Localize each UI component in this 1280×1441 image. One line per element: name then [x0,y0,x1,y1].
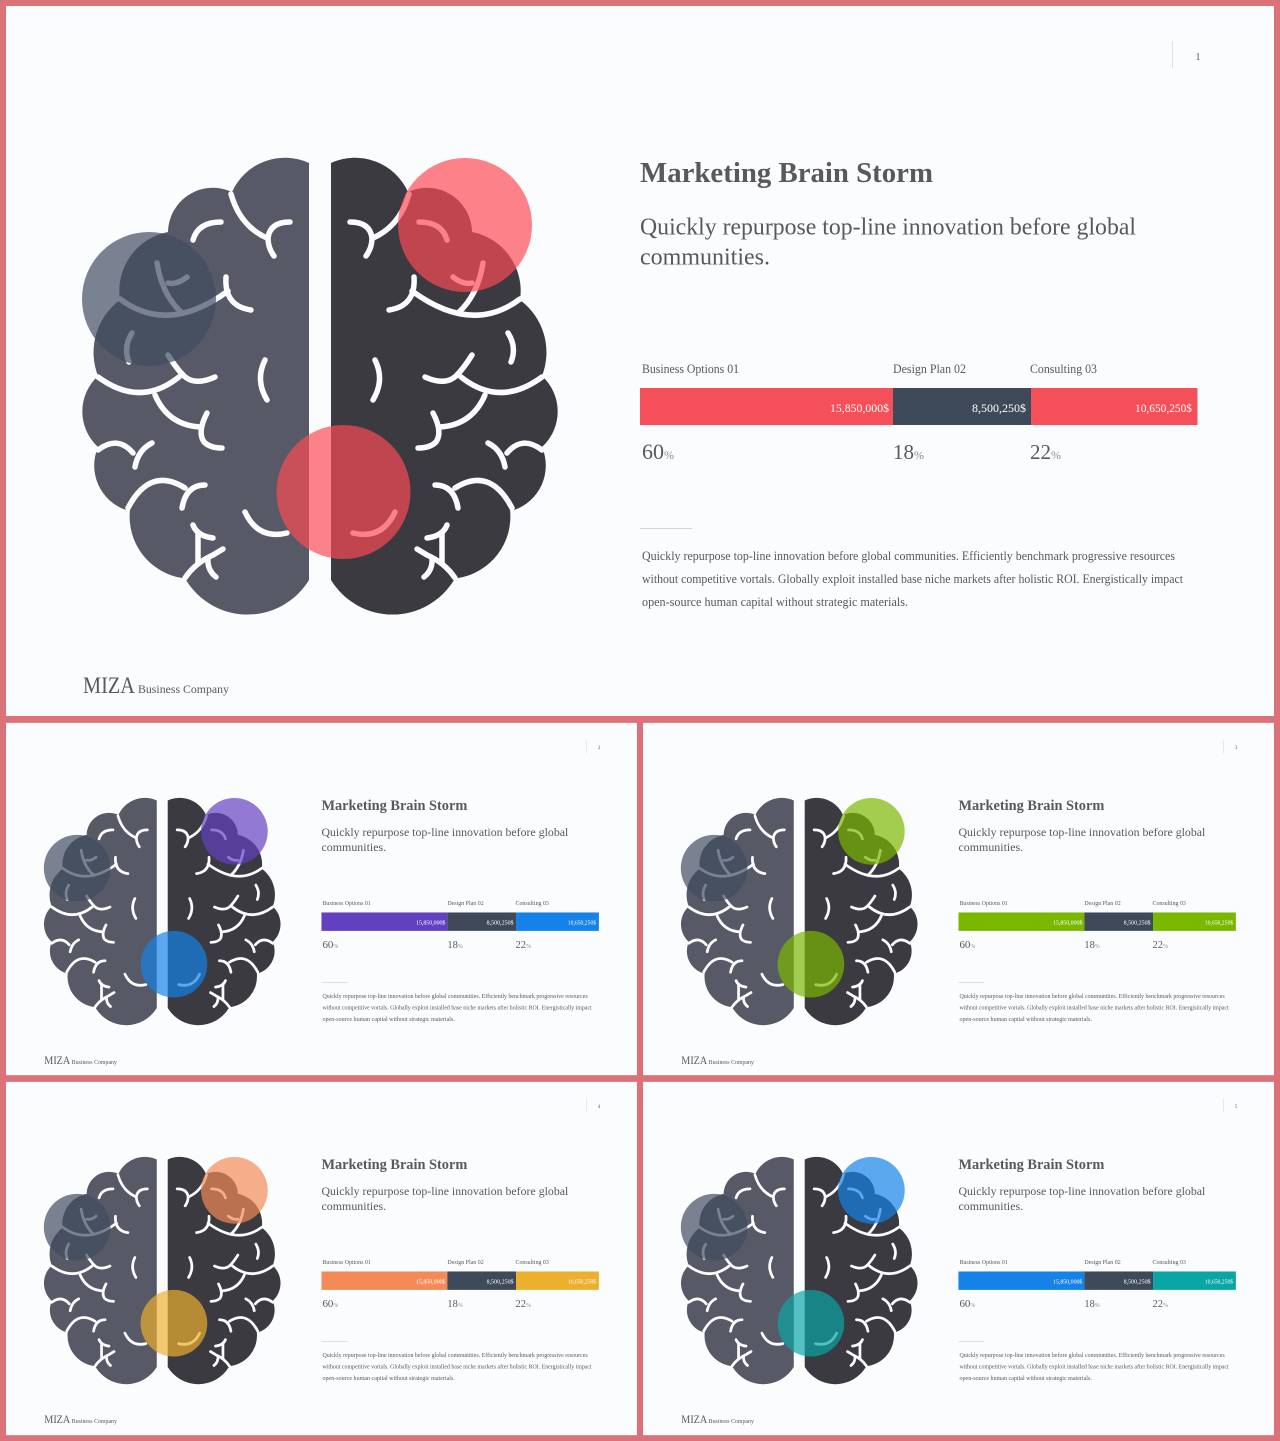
subtitle: Quickly repurpose top-line innovation before global [321,1184,569,1198]
bar chart: 8,500,250$ [487,919,514,926]
subtitle: Quickly repurpose top-line innovation before global [640,214,1136,240]
title: Marketing Brain Storm [958,798,1104,814]
page number [1223,1099,1238,1112]
bar chart: 18% [893,440,924,464]
body paragraph: without competitive vortals. Globally exploit installed base niche markets after holistic ROI. Energistically impact [322,1364,592,1371]
page number [586,1099,601,1112]
page number: 1 [1196,52,1200,63]
subtitle: communities. [958,1199,1023,1213]
subtitle [321,1184,569,1213]
bar chart: 8,500,250$ [487,1278,514,1285]
bar chart: 10,650,250$ [1135,401,1192,415]
body paragraph: open-source human capital without strategic materials. [642,595,908,609]
body paragraph: without competitive vortals. Globally exploit installed base niche markets after holistic ROI. Energistically impact [959,1364,1229,1371]
bar chart: 10,650,250$ [1205,919,1233,926]
bar chart: Consulting 03 [516,1259,549,1266]
bar chart: 60% [959,939,975,951]
bar chart: 60% [959,1298,975,1310]
bar chart: Design Plan 02 [447,1259,484,1266]
subtitle: Quickly repurpose top-line innovation before global [958,1184,1206,1198]
subtitle [958,825,1206,854]
bar chart: 18% [447,940,463,951]
page number: 4 [598,1105,601,1110]
body paragraph: without competitive vortals. Globally exploit installed base niche markets after holistic ROI. Energistically impact [959,1005,1229,1012]
logo: MIZA [681,1414,708,1426]
bar chart: Consulting 03 [1153,900,1186,907]
logo [681,1414,754,1426]
logo [44,1055,117,1067]
logo [44,1414,117,1426]
brain illustration [681,1157,918,1384]
body paragraph: open-source human capital without strategic materials. [322,1375,455,1382]
bar chart: 15,850,000$ [416,919,445,926]
bar chart [321,900,599,951]
panel: slide 4 orange and yellow [6,1082,637,1435]
brain illustration [44,798,281,1025]
body paragraph: Quickly repurpose top-line innovation before global communities. Efficiently benchmark progressive resources [322,1352,588,1359]
bar chart: Consulting 03 [1153,1259,1186,1266]
bar chart: 8,500,250$ [972,401,1026,415]
bar chart [321,1259,599,1310]
brain illustration [44,1157,281,1384]
title: Marketing Brain Storm [640,157,933,189]
bar chart: 22% [1153,940,1168,951]
page number [1172,41,1200,68]
body paragraph [322,1352,592,1382]
bar chart: Business Options 01 [959,900,1008,907]
subtitle: communities. [958,840,1023,854]
body paragraph: open-source human capital without strategic materials. [959,1016,1092,1023]
bar chart: Design Plan 02 [1084,900,1121,907]
body paragraph: without competitive vortals. Globally exploit installed base niche markets after holistic ROI. Energistically impact [322,1005,592,1012]
subtitle: communities. [640,244,770,270]
bar chart: 18% [1084,940,1100,951]
bar chart [640,362,1198,464]
subtitle [958,1184,1206,1213]
subtitle: communities. [321,1199,386,1213]
bar chart: 15,850,000$ [416,1278,445,1285]
bar chart: 10,650,250$ [568,919,596,926]
page number: 2 [598,746,601,751]
body paragraph [959,1352,1229,1382]
panel: main slide [6,6,1274,716]
logo: Business Company [709,1419,754,1425]
bar chart: Business Options 01 [642,362,739,376]
logo: MIZA [681,1055,708,1067]
bar chart: 22% [516,1299,531,1310]
panel: slide 3 green [643,723,1274,1075]
bar chart: 10,650,250$ [1205,1278,1233,1285]
bar chart: Design Plan 02 [1084,1259,1121,1266]
bar chart: 60% [642,439,674,464]
title: Marketing Brain Storm [958,1157,1104,1173]
page number: 5 [1235,1105,1238,1110]
bar chart: 22% [516,940,531,951]
bar chart: 10,650,250$ [568,1278,596,1285]
logo: MIZA [44,1055,71,1067]
bar chart: 22% [1153,1299,1168,1310]
body paragraph [959,993,1229,1023]
page number [1223,740,1238,753]
bar chart [958,1259,1236,1310]
bar chart: Consulting 03 [1030,362,1097,376]
logo: MIZA [44,1414,71,1426]
subtitle [640,214,1136,270]
bar chart: 15,850,000$ [830,401,889,415]
body paragraph: Quickly repurpose top-line innovation before global communities. Efficiently benchmark progressive resources [642,549,1175,563]
logo: MIZA [83,673,135,698]
brain illustration [681,798,918,1025]
subtitle [321,825,569,854]
panel: slide 5 blue and teal [643,1082,1274,1435]
body paragraph: Quickly repurpose top-line innovation before global communities. Efficiently benchmark progressive resources [322,993,588,1000]
subtitle: Quickly repurpose top-line innovation before global [958,825,1206,839]
logo [681,1055,754,1067]
bar chart: 22% [1030,440,1061,464]
panel: slide 2 purple and blue [6,723,637,1075]
logo: Business Company [72,1060,117,1066]
bar chart: 8,500,250$ [1124,1278,1151,1285]
bar chart [958,900,1236,951]
subtitle: Quickly repurpose top-line innovation before global [321,825,569,839]
page number [586,740,601,753]
logo: Business Company [709,1060,754,1066]
bar chart: 15,850,000$ [1053,919,1082,926]
body paragraph: open-source human capital without strategic materials. [322,1016,455,1023]
bar chart: 18% [1084,1299,1100,1310]
brain illustration [82,158,558,615]
title: Marketing Brain Storm [321,1157,467,1173]
bar chart: 15,850,000$ [1053,1278,1082,1285]
logo: Business Company [138,682,229,696]
bar chart: 60% [322,1298,338,1310]
bar chart: Business Options 01 [322,1259,371,1266]
logo [83,673,229,698]
body paragraph [322,993,592,1023]
body paragraph: open-source human capital without strategic materials. [959,1375,1092,1382]
subtitle: communities. [321,840,386,854]
bar chart: 60% [322,939,338,951]
logo: Business Company [72,1419,117,1425]
bar chart: Design Plan 02 [893,362,966,376]
bar chart: Consulting 03 [516,900,549,907]
bar chart: Business Options 01 [959,1259,1008,1266]
bar chart: Business Options 01 [322,900,371,907]
page number: 3 [1235,746,1238,751]
bar chart: Design Plan 02 [447,900,484,907]
body paragraph [642,549,1183,609]
body paragraph: Quickly repurpose top-line innovation before global communities. Efficiently benchmark progressive resources [959,1352,1225,1359]
body paragraph: without competitive vortals. Globally exploit installed base niche markets after holistic ROI. Energistically impact [642,572,1183,586]
bar chart: 18% [447,1299,463,1310]
body paragraph: Quickly repurpose top-line innovation before global communities. Efficiently benchmark progressive resources [959,993,1225,1000]
title: Marketing Brain Storm [321,798,467,814]
bar chart: 8,500,250$ [1124,919,1151,926]
